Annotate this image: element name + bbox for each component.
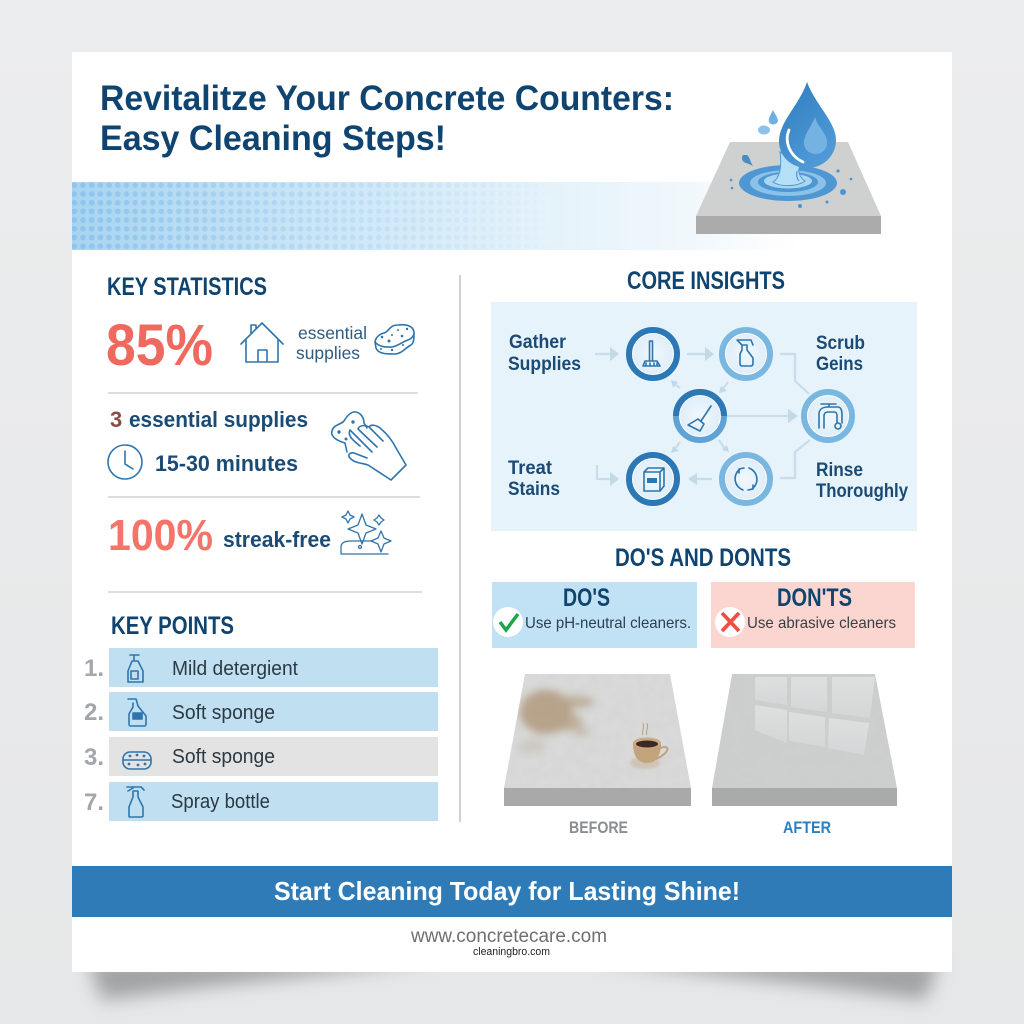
title: Easy Cleaning Steps! [100, 119, 446, 158]
panel: do's: DO'S [563, 584, 610, 612]
icon: check mark [493, 607, 523, 637]
heading: key statistics: KEY STATISTICS [107, 273, 267, 301]
stat: 15-30 minutes: 15-30 minutes [155, 451, 298, 476]
after slab image [712, 674, 897, 806]
step labels: Treat [508, 458, 553, 479]
row 1: mild detergent: Mild detergient [172, 658, 298, 680]
row 2: soft sponge: Soft sponge [172, 702, 275, 724]
panel: do's [492, 582, 697, 648]
before slab image [504, 674, 691, 806]
header banner [72, 182, 802, 250]
footer website: www.concretecare.com [410, 926, 607, 947]
title: Revitalitze Your Concrete Counters: [100, 79, 674, 118]
node: spray bottle [722, 330, 770, 378]
stat label: streak-free: streak-free [223, 527, 331, 552]
row 4: spray bottle: 7. [84, 789, 104, 816]
node: faucet [804, 392, 852, 440]
step labels: Stains [508, 479, 560, 500]
panel: key points [84, 612, 438, 821]
footer call to action band: Start Cleaning Today for Lasting Shine! [274, 876, 740, 906]
icon: hand with sponge [332, 412, 406, 480]
node: cycle [722, 455, 770, 503]
node: box [629, 455, 677, 503]
card drop shadow [88, 960, 940, 1000]
icon: water drop on concrete slab [696, 82, 881, 234]
column divider [459, 275, 461, 822]
icon: house [241, 323, 283, 362]
window reflection [755, 677, 875, 755]
panel: don'ts [711, 582, 915, 648]
row 1: mild detergent [84, 648, 438, 687]
panel: core insights flow [491, 302, 917, 531]
heading: do's and don'ts: DO'S AND DONTS [615, 544, 791, 572]
stat: 3 essential supplies: 3 [110, 407, 122, 432]
icon: sponge [375, 325, 414, 354]
step labels: Supplies [508, 354, 581, 375]
row 3: soft sponge [84, 737, 438, 776]
coffee cup [630, 723, 667, 769]
row 3: soft sponge: Soft sponge [172, 746, 275, 768]
stat: 100%: 100% [108, 511, 213, 560]
stat label: essential supplies [296, 323, 367, 363]
step labels [508, 332, 908, 502]
step labels: Gather [509, 332, 567, 353]
panel: do's: Use pH-neutral cleaners. [525, 615, 691, 632]
row 4: spray bottle: Spray bottle [171, 791, 270, 813]
coffee stain [519, 690, 594, 753]
stat: 3 essential supplies: essential supplies [129, 407, 308, 432]
panel: don'ts: Use abrasive cleaners [747, 615, 896, 632]
row 3: soft sponge: 3. [84, 744, 104, 771]
row 2: soft sponge: 2. [84, 699, 104, 726]
footer credit: cleaningbro.com [473, 946, 550, 958]
step labels: Geins [816, 354, 863, 375]
stat: 85%: 85% [106, 313, 213, 378]
stat label: essential supplies: supplies [296, 343, 360, 363]
footer call to action band [72, 866, 952, 917]
icon: clock [108, 445, 142, 479]
row 2: soft sponge [84, 692, 438, 731]
step labels: Scrub [816, 333, 865, 354]
node: brush [629, 330, 677, 378]
stat label: essential supplies: essential [298, 323, 367, 343]
title [100, 79, 674, 158]
flow arrows [595, 347, 810, 486]
card [72, 52, 952, 972]
row 4: spray bottle [84, 782, 438, 821]
step labels: Rinse [816, 460, 863, 481]
label: after: AFTER [783, 818, 831, 837]
label: before: BEFORE [569, 818, 628, 837]
panel: key statistics [106, 273, 422, 593]
panel: don'ts: DON'TS [777, 584, 852, 612]
icon: sparkles [341, 511, 391, 554]
icon: cross [715, 607, 745, 637]
step labels: Thoroughly [816, 481, 908, 502]
node: broom [676, 392, 724, 440]
heading: key points: KEY POINTS [111, 612, 234, 640]
heading: core insights: CORE INSIGHTS [627, 267, 785, 295]
row 1: mild detergent: 1. [84, 655, 104, 682]
